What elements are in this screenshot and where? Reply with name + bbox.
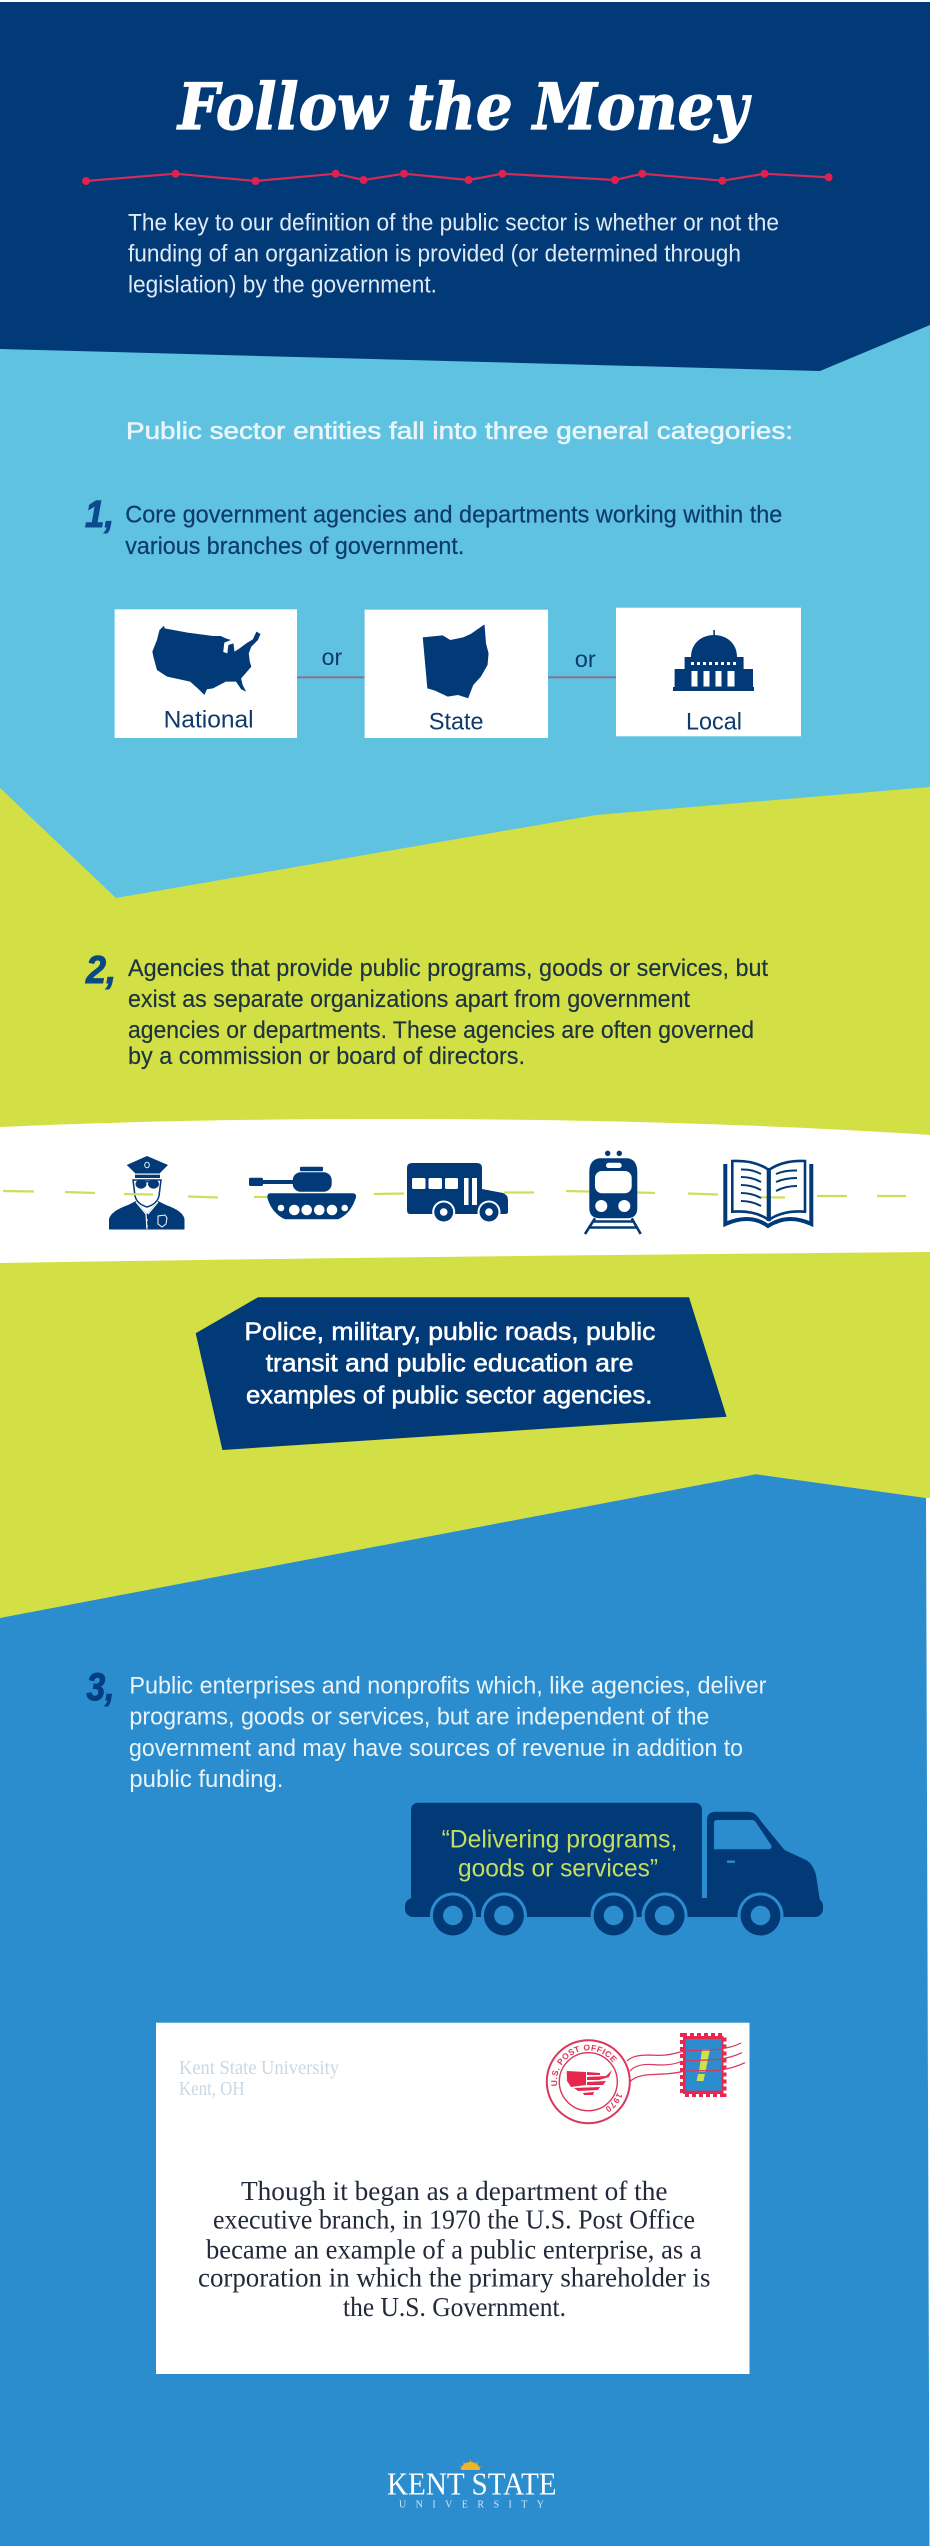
number 3: 3, (86, 1666, 114, 1709)
text: post office note: the U.S. Government. (343, 2292, 566, 2322)
icon: usa map (152, 626, 261, 695)
panel: category two background (0, 787, 930, 1618)
text: post office note: executive branch, in 1970 the U.S. Post Office (213, 2204, 695, 2234)
truck label (442, 1825, 677, 1883)
label: or: or (575, 646, 596, 672)
red trend line (82, 170, 833, 185)
text: category one: various branches of government. (125, 533, 464, 560)
text: category three (129, 1672, 766, 1793)
icon: capitol building (673, 630, 754, 691)
callout (196, 1297, 727, 1450)
text: post office note: Though it began as a department of the (241, 2176, 668, 2206)
panel: envelope (156, 2022, 750, 2374)
dashed road line (3, 1191, 906, 1198)
label: or: or (322, 644, 343, 670)
label: state: State (429, 709, 484, 736)
logo: kent state university: KENT STATE (387, 2465, 557, 2501)
text: category three: government and may have sources of revenue in addition to (129, 1735, 743, 1762)
title: Follow the Money (176, 70, 751, 145)
text: category three: programs, goods or services, but are independent of the (129, 1703, 709, 1730)
intro text: The key to our definition of the public sector is whether or not the (128, 210, 779, 237)
panel: icon band (0, 1119, 930, 1263)
heading: three categories: Public sector entities fall into three general categories: (126, 418, 793, 445)
icon: postmark: U.S. POST OFFICE (551, 2044, 617, 2086)
icon: postmark (546, 2039, 746, 2124)
logo: kent state university: UNIVERSITY (399, 2499, 544, 2510)
icon: tank (249, 1167, 356, 1219)
text: category two: exist as separate organizations apart from government (128, 986, 690, 1013)
icon: bus (407, 1163, 508, 1224)
return address: Kent, OH (179, 2078, 244, 2100)
intro text (128, 210, 779, 299)
icon: ohio map (423, 624, 489, 698)
icon: open book (725, 1161, 811, 1226)
text: category one (125, 502, 782, 560)
callout: examples of public sector agencies. (246, 1381, 652, 1409)
intro text: funding of an organization is provided (or determined through (128, 241, 741, 268)
return address (179, 2057, 339, 2100)
callout: transit and public education are (266, 1350, 634, 1378)
text: category two: by a commission or board of directors. (128, 1043, 525, 1070)
logo: kent state university (387, 2459, 557, 2510)
panel: category three background (0, 1474, 930, 2546)
text: category three: public funding. (129, 1766, 283, 1793)
text: category two: agencies or departments. These agencies are often governed (128, 1017, 754, 1044)
text: category two (128, 955, 768, 1070)
text: post office note: corporation in which the primary shareholder is (198, 2263, 710, 2293)
panel: local (616, 608, 801, 736)
text: category two: Agencies that provide public programs, goods or services, but (128, 955, 768, 982)
connector lines (297, 676, 616, 678)
panel: state (365, 610, 548, 738)
icon: delivery truck (405, 1803, 823, 1938)
text: post office note (198, 2176, 710, 2322)
return address: Kent State University (179, 2057, 339, 2079)
icon: police officer (109, 1156, 184, 1230)
callout: Police, military, public roads, public (244, 1318, 655, 1346)
text: post office note: became an example of a public enterprise, as a (206, 2234, 702, 2264)
icon: sun (460, 2459, 482, 2470)
intro text: legislation) by the government. (128, 272, 437, 299)
number 2: 2, (85, 949, 116, 992)
text: category one: Core government agencies and departments working within the (125, 502, 782, 529)
icon: train (585, 1151, 641, 1234)
truck label: goods or services” (458, 1855, 658, 1883)
panel: national (115, 609, 297, 738)
label: local: Local (686, 709, 742, 736)
truck label: “Delivering programs, (442, 1825, 677, 1853)
text: category three: Public enterprises and nonprofits which, like agencies, deliver (129, 1672, 766, 1699)
panel: header background (0, 2, 930, 371)
icon: stamp (683, 2036, 724, 2094)
number 1: 1, (85, 494, 114, 536)
label: national: National (164, 707, 254, 734)
icon: postmark: 1970 (606, 2092, 622, 2112)
